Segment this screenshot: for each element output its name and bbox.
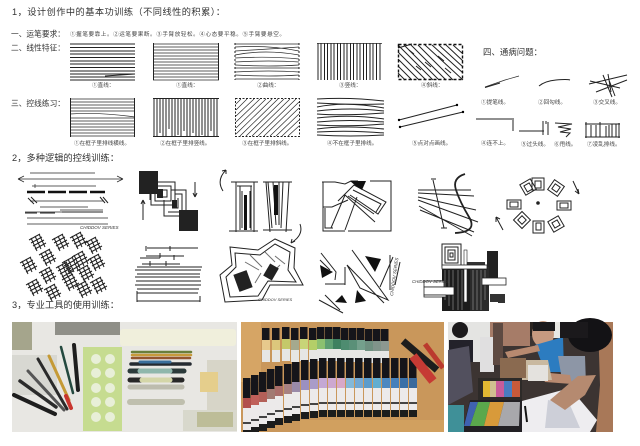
panel: problem hook line: [538, 80, 570, 106]
caption: ①提笔线。: [481, 98, 509, 106]
sketch: stepped squares: [139, 171, 198, 231]
caption: CHIDDOV SERIES: [412, 279, 449, 284]
caption: ②曲线：: [257, 81, 279, 89]
panel: problem messy line: [585, 122, 621, 148]
panel: point to point lines: [398, 104, 464, 147]
panel: problem disconnected line: [476, 118, 513, 147]
caption: CHIDDOV SERIES: [80, 225, 119, 230]
caption: ④斜线：: [421, 81, 443, 89]
panel: curved lines: [235, 43, 299, 89]
heading: line characteristics: 二、线性特征：: [11, 42, 65, 52]
caption: ⑤点对点画线。: [412, 139, 451, 147]
panel: problem crossing line: [589, 74, 627, 106]
panel: problem pen-lift line: [481, 76, 519, 106]
caption: ⑥甩线。: [554, 140, 576, 148]
panel: framed vertical lines: [153, 98, 219, 147]
caption: ④连不上。: [481, 139, 509, 147]
caption: ②在框子里排竖线。: [160, 139, 210, 147]
caption: ③竖线：: [339, 81, 361, 89]
sketch: elongated frames: [220, 170, 301, 243]
sketch: fan lines with curve: [418, 174, 478, 236]
caption: ⑤过头线。: [521, 140, 549, 148]
sketch: line and arrow exercises: [18, 173, 123, 230]
panel: unframed wavy lines: [317, 98, 384, 147]
sketch: zigzag plan: [322, 181, 391, 231]
panel: vertical lines: [317, 43, 382, 89]
caption: ②回勾线。: [538, 98, 566, 106]
panel: framed horizontal lines: [70, 98, 135, 147]
panel: problem tail line: [554, 123, 576, 148]
caption: ①在框子里排线横线。: [74, 139, 130, 147]
panel: straight lines 2: [153, 43, 219, 89]
sketch: folded arrows plan: [319, 250, 400, 313]
caption: ①直线：: [176, 81, 198, 89]
caption: ①直线：: [92, 81, 114, 89]
heading: section 1: 1，设计创作中的基本功训练（不同线性的积累）：: [12, 6, 225, 17]
photo: rows of coloured markers on wood: [241, 322, 444, 437]
panel: diagonal lines: [398, 44, 463, 89]
caption: ③交叉线。: [593, 98, 621, 106]
panel: problem arrow-head line: [519, 121, 549, 148]
sketch: circular arrangement: [496, 178, 579, 233]
heading: pen requirements: 一、运笔要求：: [11, 28, 65, 38]
caption: CHIDDOV SERIES: [389, 257, 399, 296]
photo: drawing tools on a desk: [12, 322, 237, 432]
heading: common problems: 四、通病问题：: [483, 47, 542, 57]
photo: students drawing at a table: [448, 318, 613, 432]
sketch: hatched block composition: [412, 244, 506, 311]
sketch: horizontal strokes with ticks: [135, 246, 202, 302]
heading: section 3: 3，专业工具的使用训练：: [12, 299, 119, 310]
caption: ⑦凌乱排线。: [587, 140, 621, 148]
sketch: star polygon plan: [220, 239, 303, 302]
caption: CHIDDOV SERIES: [258, 297, 293, 302]
text: pen requirements list: ①握笔要靠上。②运笔要果断。③手臂放轻松。④心态要平稳。⑤手臂要悬空。: [70, 30, 285, 38]
sketch: scattered hatch squares: [20, 232, 107, 301]
panel: straight lines 1: [70, 44, 135, 89]
heading: line control practice: 三、控线练习：: [11, 98, 65, 108]
caption: ④不在框子里排线。: [327, 139, 377, 147]
panel: framed diagonal lines: [236, 98, 300, 147]
caption: ③在框子里排斜线。: [242, 139, 292, 147]
heading: section 2: 2，多种逻辑的控线训练：: [12, 152, 119, 163]
